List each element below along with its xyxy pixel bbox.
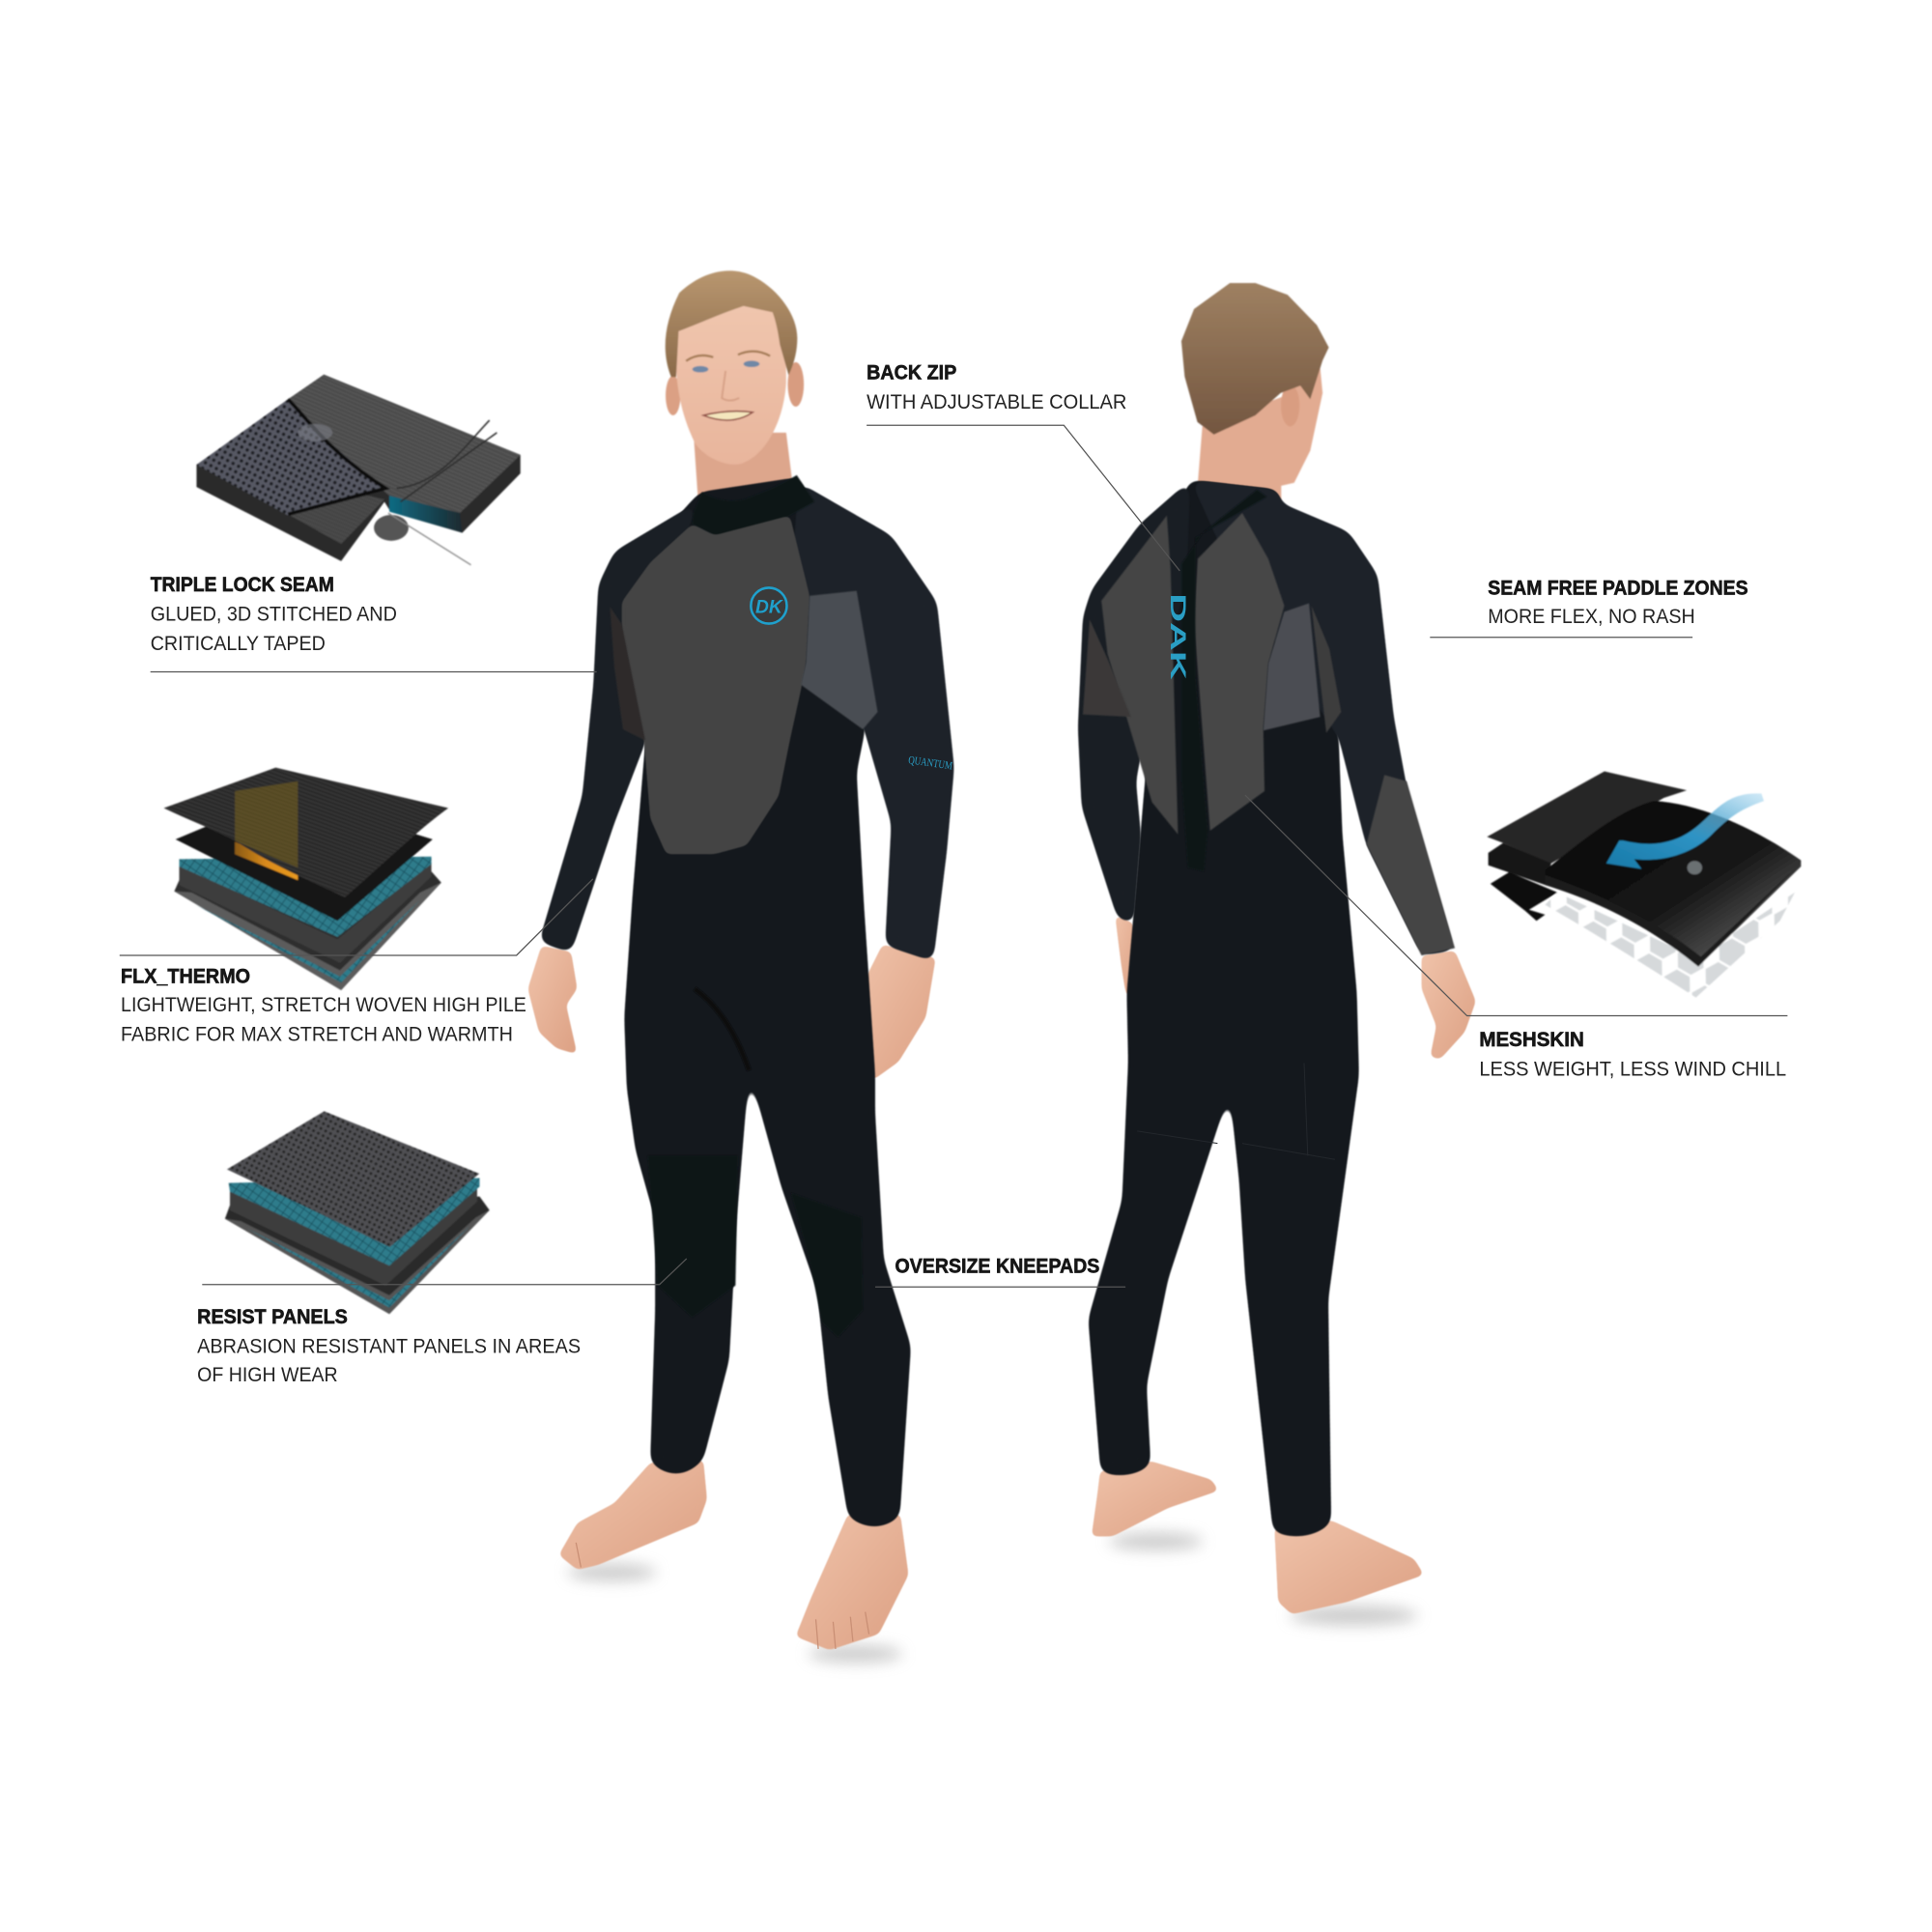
- hands: [1115, 915, 1476, 1060]
- callout: triple lock seam: TRIPLE LOCK SEAM: [151, 574, 334, 596]
- feet: [1092, 1461, 1424, 1614]
- icon: blue wind arrow: [1606, 793, 1764, 869]
- callout: flx thermo: FLX_THERMO: [121, 966, 250, 988]
- callout: meshskin: LESS WEIGHT, LESS WIND CHILL: [1479, 1058, 1786, 1080]
- logo: DK chest: DK: [755, 598, 784, 618]
- wetsuit torso and legs: [1088, 479, 1359, 1537]
- icon: water droplet: [1688, 861, 1702, 874]
- toes: [576, 1543, 869, 1649]
- callout: triple lock seam: GLUED, 3D STITCHED AND: [151, 604, 397, 626]
- panel: chest grey: [622, 516, 810, 854]
- callout: seam free paddle zones: SEAM FREE PADDLE ZONES: [1488, 578, 1748, 600]
- swatch: flx thermo layers: [164, 768, 448, 990]
- callout: flx thermo: FABRIC FOR MAX STRETCH AND WARMTH: [121, 1024, 513, 1046]
- right arm: [791, 482, 954, 962]
- panel: side dark left: [610, 607, 645, 740]
- eyes: [693, 360, 759, 373]
- callout: back zip: WITH ADJUSTABLE COLLAR: [867, 391, 1126, 413]
- figure: back view wearing wetsuit: [1078, 283, 1476, 1626]
- smile: [703, 412, 753, 420]
- callout: resist panels: ABRASION RESISTANT PANELS IN AREAS: [197, 1336, 581, 1358]
- knee seams: [1137, 1063, 1335, 1159]
- callout: back zip: BACK ZIP: [867, 361, 956, 384]
- callout: triple lock seam: CRITICALLY TAPED: [151, 633, 326, 655]
- callout: seam free paddle zones: [1430, 578, 1748, 638]
- foot shadows: [567, 1564, 902, 1662]
- panel: back right grey: [1194, 513, 1284, 831]
- panel: back left grey: [1101, 516, 1178, 835]
- hands: [527, 945, 936, 1080]
- panel: side grey: [1264, 603, 1321, 730]
- logo: sleeve quantum: QUANTUM: [907, 754, 953, 772]
- right arm: [1190, 479, 1455, 955]
- callout: seam free paddle zones: MORE FLEX, NO RASH: [1488, 606, 1695, 628]
- logo: DK chest: [751, 587, 786, 624]
- knee panels: [648, 1155, 863, 1338]
- callout: resist panels: OF HIGH WEAR: [197, 1364, 338, 1386]
- left arm: [1078, 479, 1190, 924]
- figure: front view wearing wetsuit: [527, 270, 954, 1662]
- panel: forearm grey: [1367, 775, 1455, 955]
- feet: [558, 1460, 908, 1650]
- left arm: [539, 500, 699, 953]
- callout: flx thermo: [120, 879, 593, 1046]
- swatch: resist panels layers: [225, 1111, 490, 1314]
- foot shadows: [1109, 1533, 1418, 1626]
- neck and head: [666, 270, 804, 504]
- wetsuit torso and legs: [624, 477, 911, 1527]
- swatch: meshskin layers: [1487, 771, 1801, 998]
- swatch: triple lock seam: [196, 375, 521, 565]
- callout: oversize kneepads: OVERSIZE KNEEPADS: [895, 1256, 1099, 1278]
- callout: flx thermo: LIGHTWEIGHT, STRETCH WOVEN HIGH PILE: [121, 994, 526, 1016]
- panel: left arm grey: [1083, 619, 1131, 717]
- collar: [693, 475, 814, 536]
- neck and head: [1181, 283, 1329, 500]
- callout: resist panels: [197, 1259, 687, 1386]
- callout: triple lock seam: [151, 574, 597, 671]
- callout: back zip: [867, 361, 1179, 571]
- crotch seam: [695, 989, 749, 1070]
- back zip logo: DAK: [1166, 593, 1190, 680]
- panel: side grey right: [801, 591, 878, 729]
- callout: meshskin: MESHSKIN: [1479, 1029, 1584, 1051]
- zipper flap: [1181, 490, 1267, 871]
- panel: upper arm grey: [1312, 606, 1341, 733]
- callout: resist panels: RESIST PANELS: [197, 1306, 348, 1328]
- callout: meshskin: [1245, 795, 1787, 1080]
